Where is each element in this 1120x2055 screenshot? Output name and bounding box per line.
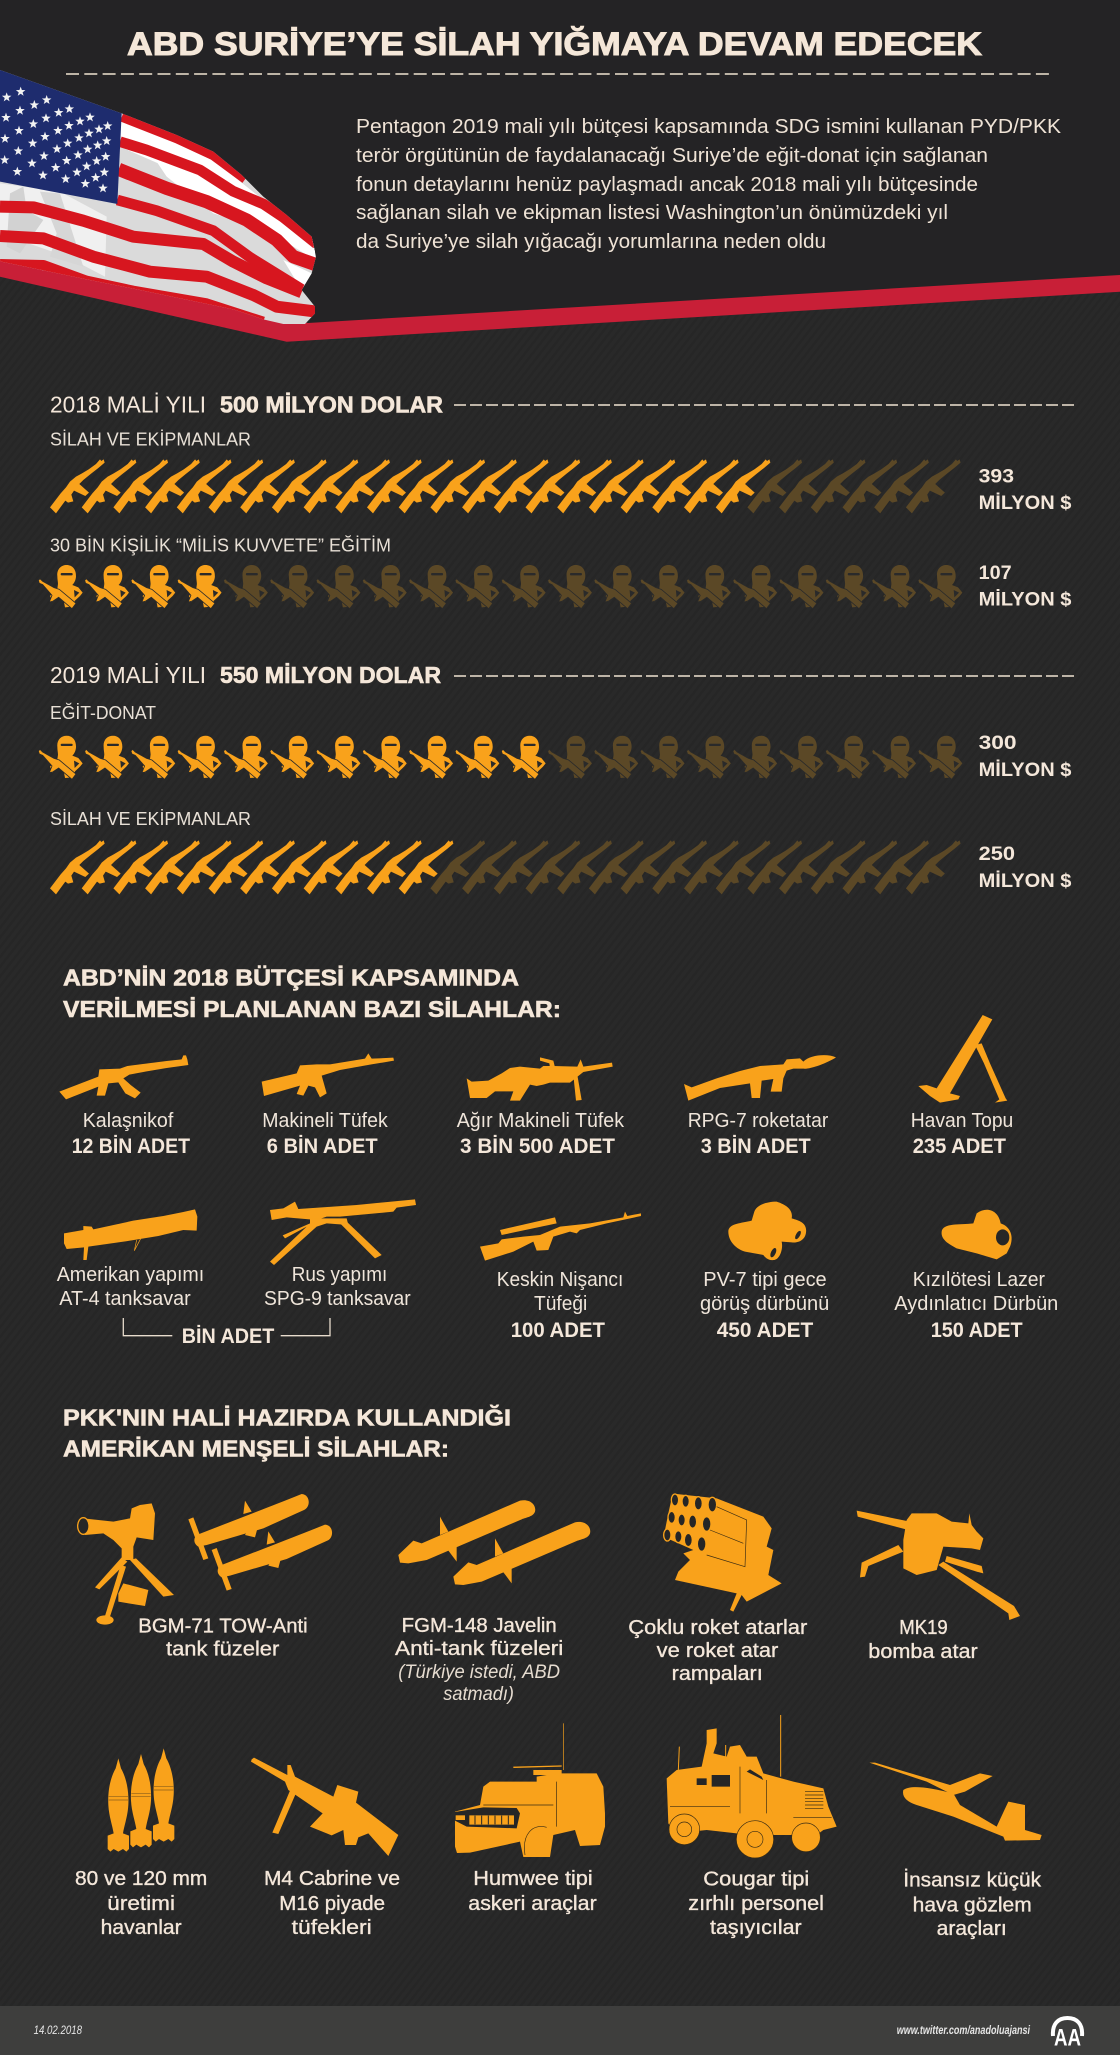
text: spg-9 xyxy=(264,1264,411,1310)
value: 300 million: 300 xyxy=(979,733,1017,754)
text: mortar shells xyxy=(75,1868,207,1939)
value: 300 million: MİLYON $ xyxy=(979,760,1072,781)
text: drone xyxy=(903,1869,1042,1940)
text: infrared scope xyxy=(894,1269,1058,1342)
text: heavy machine gun: 3 BİN 500 ADET xyxy=(460,1135,615,1158)
logo: anadolu agency: AA xyxy=(1054,2025,1081,2052)
icon: american flag xyxy=(0,70,317,324)
icon: spg-9 xyxy=(270,1199,416,1265)
text: sniper rifle: Keskin Nişancı xyxy=(497,1269,623,1291)
text: cougar xyxy=(688,1869,824,1939)
panel: 2018 budget xyxy=(38,392,1076,610)
text: cougar: Cougar tipi xyxy=(703,1869,809,1891)
text: mortar shells: 80 ve 120 mm xyxy=(75,1868,207,1890)
text: javelin xyxy=(395,1615,563,1705)
intro text: da Suriye’ye silah yığacağı yorumlarına neden oldu xyxy=(356,231,826,253)
panel: 2019 budget xyxy=(38,662,1076,894)
value: 393 million: 393 xyxy=(979,467,1014,488)
text: m4: M16 piyade xyxy=(279,1893,385,1915)
icon: humvee xyxy=(455,1723,605,1857)
icon: mortar shells xyxy=(108,1748,174,1852)
value: 250 million: 250 xyxy=(979,844,1015,865)
label: weapons 2019: SİLAH VE EKİPMANLAR xyxy=(50,809,251,829)
bracket: thousand pieces: BİN ADET xyxy=(182,1325,274,1348)
text: m4 xyxy=(264,1868,400,1939)
icon: cougar armored vehicle xyxy=(667,1715,837,1858)
icon: small drone xyxy=(869,1763,1042,1841)
text: rocket launcher: Çoklu roket atarlar xyxy=(628,1617,808,1639)
text: humvee: askeri araçlar xyxy=(468,1893,597,1915)
icon: at-4 xyxy=(64,1209,197,1260)
logo: anadolu agency xyxy=(1053,2018,1082,2052)
text: kalashnikov: Kalaşnikof xyxy=(83,1110,174,1132)
icon: infrared scope xyxy=(942,1210,1012,1259)
heading: planned weapons: VERİLMESİ PLANLANAN BAZI SİLAHLAR: xyxy=(63,996,561,1022)
heading: 2018 fiscal year: 500 MİLYON DOLAR xyxy=(220,392,443,418)
text: sniper rifle xyxy=(497,1269,623,1342)
text: m4: tüfekleri xyxy=(292,1917,372,1939)
text: tow xyxy=(138,1616,308,1661)
text: rpg-7 xyxy=(688,1110,829,1158)
heading: american weapons in use: AMERİKAN MENŞELİ SİLAHLAR: xyxy=(63,1436,449,1462)
value: 107 million xyxy=(979,563,1072,610)
intro text: Pentagon 2019 mali yılı bütçesi kapsamında SDG ismini kullanan PYD/PKK xyxy=(356,116,1062,138)
text: machine gun: 6 BİN ADET xyxy=(267,1135,378,1158)
text: m4: M4 Cabrine ve xyxy=(264,1868,400,1890)
text: infrared scope: 150 ADET xyxy=(931,1319,1023,1342)
text: machine gun: Makineli Tüfek xyxy=(262,1110,389,1132)
icon: machine gun xyxy=(262,1053,394,1097)
text: sniper rifle: Tüfeği xyxy=(534,1293,587,1315)
text: infrared scope: Aydınlatıcı Dürbün xyxy=(894,1293,1058,1315)
icon: rocket launcher xyxy=(663,1494,782,1612)
text: mortar shells: havanlar xyxy=(101,1917,182,1939)
footer xyxy=(0,2006,1120,2055)
text: rocket launcher xyxy=(628,1617,808,1685)
value: 393 million: MİLYON $ xyxy=(979,493,1072,514)
text: sniper rifle: 100 ADET xyxy=(511,1319,605,1342)
text: javelin: satmadı) xyxy=(443,1684,514,1705)
text: heavy machine gun xyxy=(457,1110,625,1158)
intro text xyxy=(356,116,1062,253)
pictogram: rifles 393 million xyxy=(50,459,961,513)
value: 393 million xyxy=(979,467,1072,514)
top header panel xyxy=(0,0,1120,324)
text: heavy machine gun: Ağır Makineli Tüfek xyxy=(457,1110,625,1132)
intro text: sağlanan silah ve ekipman listesi Washington’un önümüzdeki yıl xyxy=(356,202,948,224)
text: javelin: FGM-148 Javelin xyxy=(402,1615,557,1637)
text: mk19 xyxy=(868,1617,978,1663)
title: ABD SURİYE’YE SİLAH YIĞMAYA DEVAM EDECEK xyxy=(127,26,982,62)
icon: night vision xyxy=(728,1202,806,1260)
heading: 2018 fiscal year xyxy=(50,392,1076,418)
text: night vision: PV-7 tipi gece xyxy=(703,1269,827,1291)
text: rpg-7: 3 BİN ADET xyxy=(701,1135,811,1158)
heading: 2018 fiscal year: 2018 MALİ YILI xyxy=(50,392,206,418)
text: javelin: (Türkiye istedi, ABD xyxy=(398,1662,560,1683)
heading: 2019 fiscal year xyxy=(50,662,1076,688)
icon: tow launcher and missiles xyxy=(77,1494,332,1625)
label: militia training: 30 BİN KİŞİLİK “MİLİS KUVVETE” EĞİTİM xyxy=(50,534,391,556)
bracket: thousand pieces xyxy=(123,1318,330,1348)
text: mortar shells: üretimi xyxy=(107,1893,175,1915)
heading: 2019 fiscal year: 550 MİLYON DOLAR xyxy=(220,662,441,688)
text: mortar xyxy=(911,1110,1013,1158)
panel: planned weapons grid xyxy=(57,1015,1058,1348)
text: rocket launcher: rampaları xyxy=(672,1663,763,1685)
text: drone: İnsansız küçük xyxy=(903,1869,1042,1892)
heading: american weapons in use: PKK'NIN HALİ HAZIRDA KULLANDIĞI xyxy=(63,1404,511,1431)
text: humvee: Humwee tipi xyxy=(473,1868,593,1890)
date: 14.02.2018 xyxy=(34,2023,82,2037)
heading: planned weapons: ABD’NİN 2018 BÜTÇESİ KAPSAMINDA xyxy=(63,965,519,991)
icon: kalashnikov xyxy=(59,1055,188,1099)
source url: www.twitter.com/anadoluajansi xyxy=(897,2023,1030,2037)
label: train and equip: EĞİT-DONAT xyxy=(50,702,156,723)
text: rocket launcher: ve roket atar xyxy=(657,1640,779,1662)
text: at-4 xyxy=(57,1264,204,1310)
text: mortar: 235 ADET xyxy=(913,1135,1006,1158)
text: night vision xyxy=(700,1269,829,1342)
label: weapons 2018: SİLAH VE EKİPMANLAR xyxy=(50,429,251,449)
heading: 2019 fiscal year: 2019 MALİ YILI xyxy=(50,662,206,688)
icon: heavy machine gun xyxy=(467,1057,613,1101)
text: tow: tank füzeler xyxy=(166,1639,280,1661)
text: cougar: taşıyıcılar xyxy=(710,1917,802,1939)
text: kalashnikov xyxy=(72,1110,190,1158)
intro text: fonun detaylarını henüz paylaşmadı ancak 2018 mali yılı bütçesinde xyxy=(356,174,978,196)
heading: american weapons in use xyxy=(63,1404,511,1462)
icon: rpg-7 xyxy=(684,1055,836,1101)
value: 300 million xyxy=(979,733,1072,781)
value: 250 million: MİLYON $ xyxy=(979,871,1072,892)
text: kalashnikov: 12 BİN ADET xyxy=(72,1135,190,1158)
text: infrared scope: Kızılötesi Lazer xyxy=(913,1269,1045,1291)
value: 107 million: MİLYON $ xyxy=(979,590,1072,610)
text: night vision: 450 ADET xyxy=(717,1319,813,1342)
text: tow: BGM-71 TOW-Anti xyxy=(138,1616,308,1638)
panel: american weapons grid xyxy=(75,1494,1042,1940)
text: cougar: zırhlı personel xyxy=(688,1893,824,1915)
pictogram: militants 107 million xyxy=(38,565,962,609)
text: drone: araçları xyxy=(937,1918,1007,1940)
text: spg-9: Rus yapımı xyxy=(292,1264,387,1286)
icon: mk19 xyxy=(857,1511,1020,1620)
text: at-4: Amerikan yapımı xyxy=(57,1264,204,1286)
pictogram: rifles 250 million xyxy=(50,840,961,894)
text: machine gun xyxy=(262,1110,389,1158)
pictogram: militants 300 million xyxy=(38,736,962,779)
text: at-4: AT-4 tanksavar xyxy=(59,1288,191,1310)
text: night vision: görüş dürbünü xyxy=(700,1293,829,1315)
red ribbon xyxy=(0,260,1120,342)
value: 250 million xyxy=(979,844,1072,892)
heading: planned weapons xyxy=(63,965,561,1022)
text: rpg-7: RPG-7 roketatar xyxy=(688,1110,829,1132)
text: javelin: Anti-tank füzeleri xyxy=(395,1638,563,1660)
value: 107 million: 107 xyxy=(979,563,1012,584)
text: spg-9: SPG-9 tanksavar xyxy=(264,1288,411,1310)
icon: m4 rifle xyxy=(251,1758,398,1856)
icon: javelin missiles xyxy=(398,1500,590,1585)
text: humvee xyxy=(468,1868,597,1915)
text: mk19: MK19 xyxy=(899,1617,948,1639)
text: mortar: Havan Topu xyxy=(911,1110,1013,1132)
icon: mortar xyxy=(918,1015,1007,1103)
text: drone: hava gözlem xyxy=(913,1895,1032,1917)
icon: sniper rifle xyxy=(480,1212,641,1261)
intro text: terör örgütünün de faydalanacağı Suriye’de eğit-donat için sağlanan xyxy=(356,145,988,167)
text: mk19: bomba atar xyxy=(868,1641,978,1663)
